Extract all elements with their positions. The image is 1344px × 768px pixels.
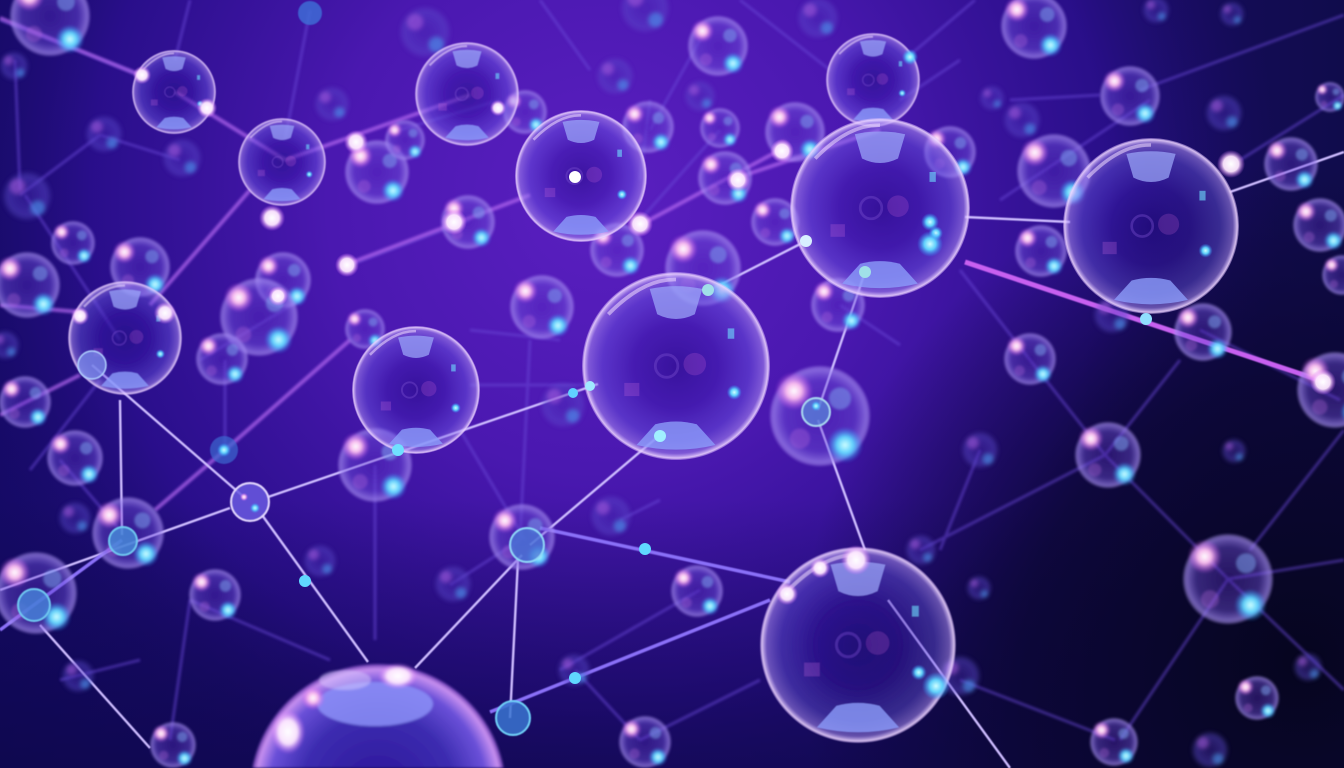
bright pink beam to the right edge — [965, 262, 1325, 382]
connector nodes — [18, 1, 830, 735]
violet lower lines — [0, 528, 790, 712]
large bubble: top right of center — [826, 33, 920, 127]
large bubble: top center — [344, 42, 519, 154]
large bubble: center-left — [352, 326, 480, 454]
large bubble: center — [582, 272, 770, 460]
large bubble: top left center — [238, 118, 326, 231]
large bubble: bottom center-right — [760, 545, 956, 743]
large bubble: upper center — [515, 110, 653, 242]
large bubble: right — [1063, 138, 1239, 314]
pink connector lines — [0, 18, 880, 510]
large bubble: upper left — [132, 50, 217, 134]
large bubble: bottom center, cut off by the frame — [252, 663, 504, 768]
large bubble: far left lower — [68, 281, 182, 395]
large bubble: upper right of center — [790, 118, 970, 298]
glowing joints — [268, 139, 1336, 684]
